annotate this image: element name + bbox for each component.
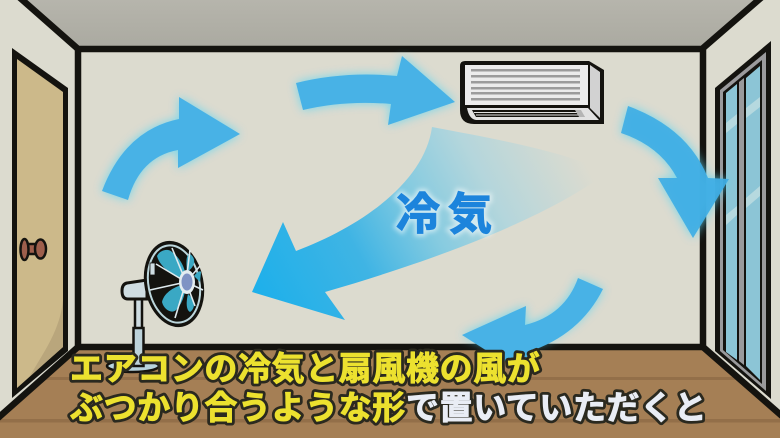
floor — [0, 348, 780, 438]
icon: door knob — [20, 239, 46, 260]
caption: エアコンの冷気と扇風機の風が — [70, 350, 540, 387]
door — [12, 48, 68, 398]
caption: ぶつかり合うような形で置いていただくと — [70, 389, 707, 426]
arrow glows — [102, 56, 729, 347]
label: cold air: 冷気 — [396, 190, 500, 239]
icon: electric fan — [107, 237, 209, 372]
ceiling — [18, 0, 762, 50]
caption — [70, 350, 707, 426]
label: cold air: 冷気 — [396, 190, 500, 239]
large cold air arrow — [252, 127, 608, 320]
caption: エアコンの冷気と扇風機の風が — [70, 350, 540, 387]
icon: air conditioner — [460, 61, 604, 124]
arrow: bottom toward floor — [462, 278, 603, 372]
arrow: upper left — [102, 97, 240, 200]
sliding window — [715, 41, 771, 399]
arrow: right side downward — [621, 106, 729, 238]
caption: ぶつかり合うような形で置いていただくと — [70, 389, 707, 426]
arrow: toward air conditioner — [296, 56, 455, 125]
